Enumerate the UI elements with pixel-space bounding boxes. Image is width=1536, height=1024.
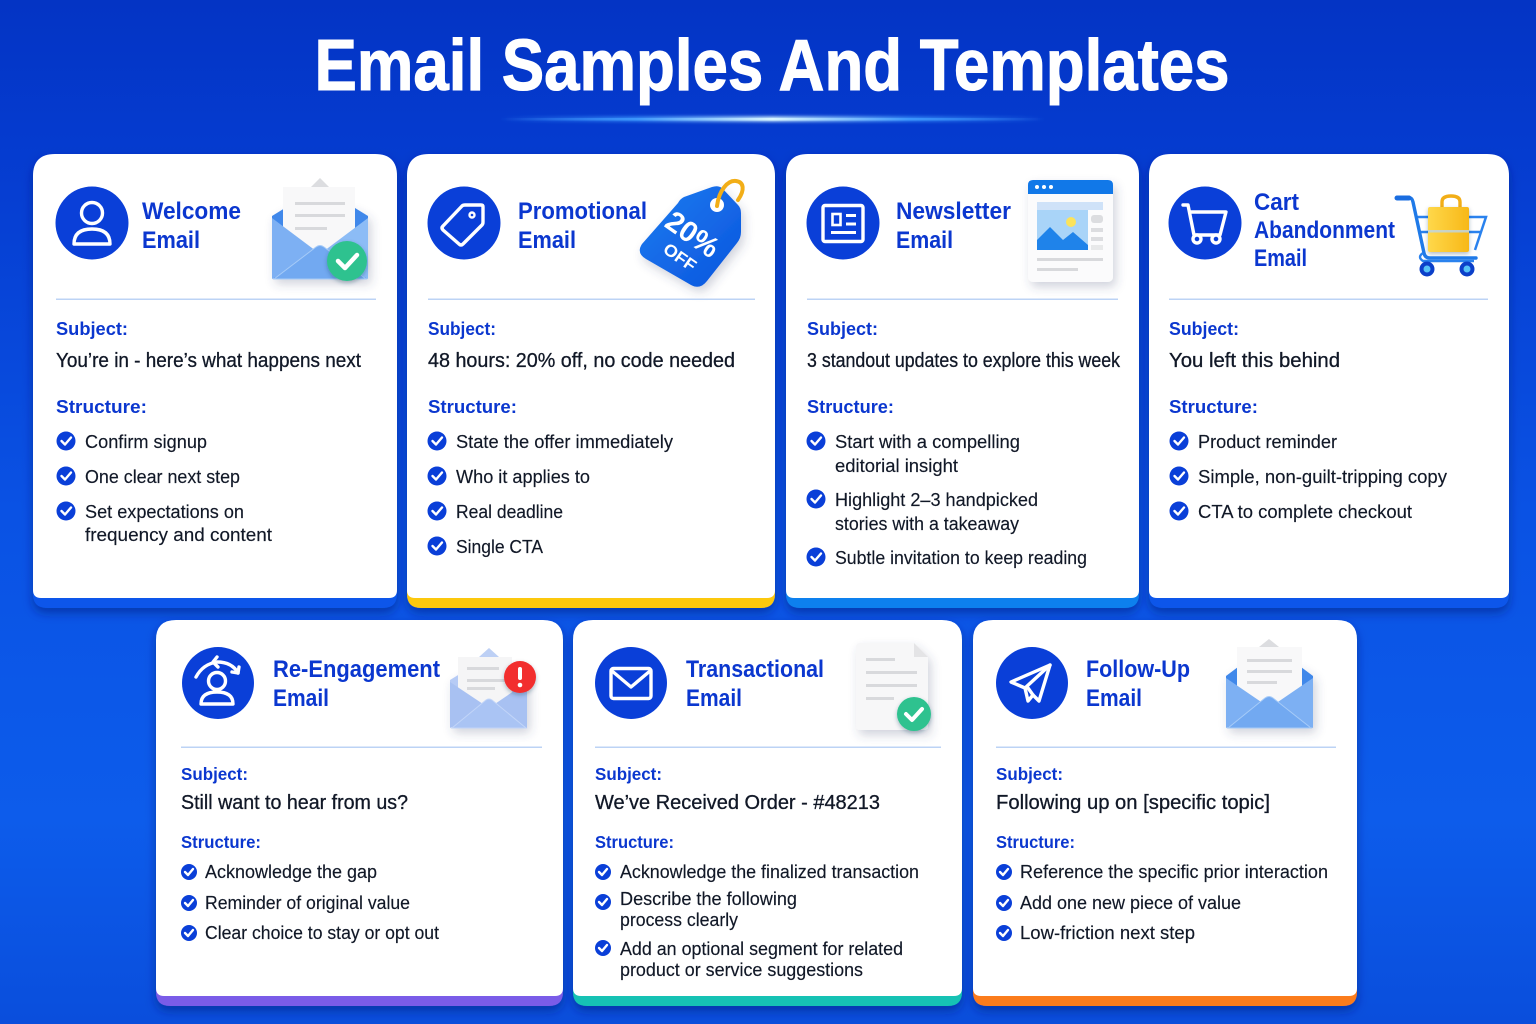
illustration: document with check [856, 643, 931, 731]
illustration: newsletter window [1028, 180, 1113, 282]
bullet list: product or service suggestions [620, 960, 863, 980]
heading: Follow-Up [1086, 656, 1190, 683]
subject: 3 standout updates to explore this week [807, 350, 1121, 372]
bullet list [56, 431, 272, 545]
subject: Following up on [specific topic] [996, 792, 1270, 814]
heading: Email [273, 685, 329, 712]
bullet list [806, 431, 1087, 568]
bullet list: State the offer immediately [456, 431, 674, 452]
heading: Transactional [686, 656, 824, 683]
illustration: open envelope with check [272, 178, 368, 281]
divider [996, 746, 1336, 748]
bullet list: Start with a compelling [835, 431, 1020, 452]
bullet list: Add one new piece of value [1020, 893, 1241, 913]
subject [595, 764, 880, 814]
subject: Still want to hear from us? [181, 792, 408, 814]
panel: re-engagement email [156, 620, 563, 1006]
structure label: Structure: [807, 396, 894, 417]
bullet list: CTA to complete checkout [1198, 501, 1412, 522]
structure label: Structure: [181, 832, 261, 852]
bullet list: Highlight 2–3 handpicked [835, 489, 1038, 510]
heading: Cart [1254, 189, 1299, 216]
card body and accent strip [1149, 154, 1509, 608]
panel: promotional email [407, 154, 775, 608]
bullet list: Reminder of original value [205, 893, 410, 913]
panel: welcome email [33, 154, 397, 608]
subject: Subject: [996, 764, 1063, 784]
subject: Subject: [428, 318, 496, 339]
subject: You left this behind [1169, 350, 1340, 372]
bullet list [996, 862, 1328, 943]
bullet list: Acknowledge the gap [205, 862, 377, 882]
bullet list: Reference the specific prior interaction [1020, 862, 1328, 882]
structure label: Structure: [996, 832, 1075, 852]
bullet list: Describe the following [620, 889, 797, 909]
heading: Email [1086, 685, 1142, 712]
bullet list: Subtle invitation to keep reading [835, 547, 1087, 568]
subject: Subject: [807, 318, 878, 339]
bullet list: Add an optional segment for related [620, 939, 903, 959]
structure label: Structure: [595, 832, 674, 852]
heading: Re-Engagement [273, 656, 440, 683]
icon: person with cycle arrows [182, 647, 254, 719]
divider [595, 746, 941, 748]
panel: cart abandonment email [1149, 154, 1509, 608]
heading: Email [896, 227, 953, 254]
subject [996, 764, 1270, 814]
subject: Subject: [595, 764, 662, 784]
card body and accent strip [407, 154, 775, 608]
panel: follow-up email [973, 620, 1357, 1006]
icon: newspaper [806, 186, 880, 260]
subject [807, 318, 1121, 372]
heading: Email [142, 227, 200, 254]
divider [56, 298, 376, 300]
bullet list: stories with a takeaway [835, 513, 1020, 534]
heading: Promotional [518, 198, 647, 225]
structure label: Structure: [1169, 396, 1258, 417]
subject: Subject: [181, 764, 248, 784]
bullet list: Acknowledge the finalized transaction [620, 862, 919, 882]
bullet list: Product reminder [1198, 431, 1337, 452]
illustration: 20% off tag [640, 181, 743, 287]
bullet list: process clearly [620, 910, 738, 930]
icon: price tag [428, 186, 500, 260]
subject: 48 hours: 20% off, no code needed [428, 350, 735, 372]
icon: paper plane [996, 647, 1068, 719]
subject [428, 318, 735, 372]
divider [181, 746, 542, 748]
bullet list [181, 862, 439, 943]
icon: envelope [595, 647, 667, 719]
structure label: Structure: [428, 396, 517, 417]
bullet list: One clear next step [85, 466, 240, 487]
divider [807, 298, 1118, 300]
illustration: cart with shopping bag [1397, 196, 1486, 276]
bullet list [428, 431, 674, 557]
bullet list: Confirm signup [85, 431, 207, 452]
bullet list: Set expectations on [85, 501, 244, 522]
heading: Welcome [142, 198, 241, 225]
subject: Subject: [56, 318, 128, 339]
bullet list: frequency and content [85, 524, 272, 545]
card body and accent strip [973, 620, 1357, 1006]
heading: Email [686, 685, 742, 712]
heading: Email [518, 227, 576, 254]
bullet list: editorial insight [835, 455, 958, 476]
subject: You’re in - here’s what happens next [56, 350, 361, 372]
subject: Subject: [1169, 318, 1239, 339]
illustration: open envelope [1226, 639, 1313, 728]
illustration: envelope with alert [450, 648, 536, 728]
structure label: Structure: [56, 396, 147, 417]
divider [428, 298, 755, 300]
bullet list: Real deadline [456, 501, 563, 522]
icon: shopping cart [1168, 186, 1242, 260]
subject [181, 764, 408, 814]
illustration: 20% off tag: OFF [660, 239, 700, 276]
bullet list: Single CTA [456, 536, 544, 557]
subject [1169, 318, 1340, 372]
icon: person [56, 186, 128, 260]
bullet list: Simple, non-guilt-tripping copy [1198, 466, 1448, 487]
card body and accent strip [573, 620, 962, 1006]
subject: We’ve Received Order - #48213 [595, 792, 880, 814]
heading: Newsletter [896, 198, 1011, 225]
heading: Email [1254, 245, 1307, 272]
card body and accent strip [786, 154, 1139, 608]
illustration: 20% off tag: 20% [659, 205, 725, 265]
title: Email Samples And Templates [314, 26, 1230, 106]
title glow underline [500, 116, 1045, 122]
panel: newsletter email [786, 154, 1139, 608]
bullet list: Who it applies to [456, 466, 590, 487]
bullet list: Low-friction next step [1020, 923, 1195, 943]
panel: transactional email [573, 620, 962, 1006]
subject [56, 318, 361, 372]
card body and accent strip [33, 154, 397, 608]
bullet list [595, 862, 919, 980]
card body and accent strip [156, 620, 563, 1006]
bullet list: Clear choice to stay or opt out [205, 923, 439, 943]
bullet list [1170, 431, 1448, 522]
divider [1169, 298, 1488, 300]
heading: Abandonment [1254, 217, 1395, 244]
